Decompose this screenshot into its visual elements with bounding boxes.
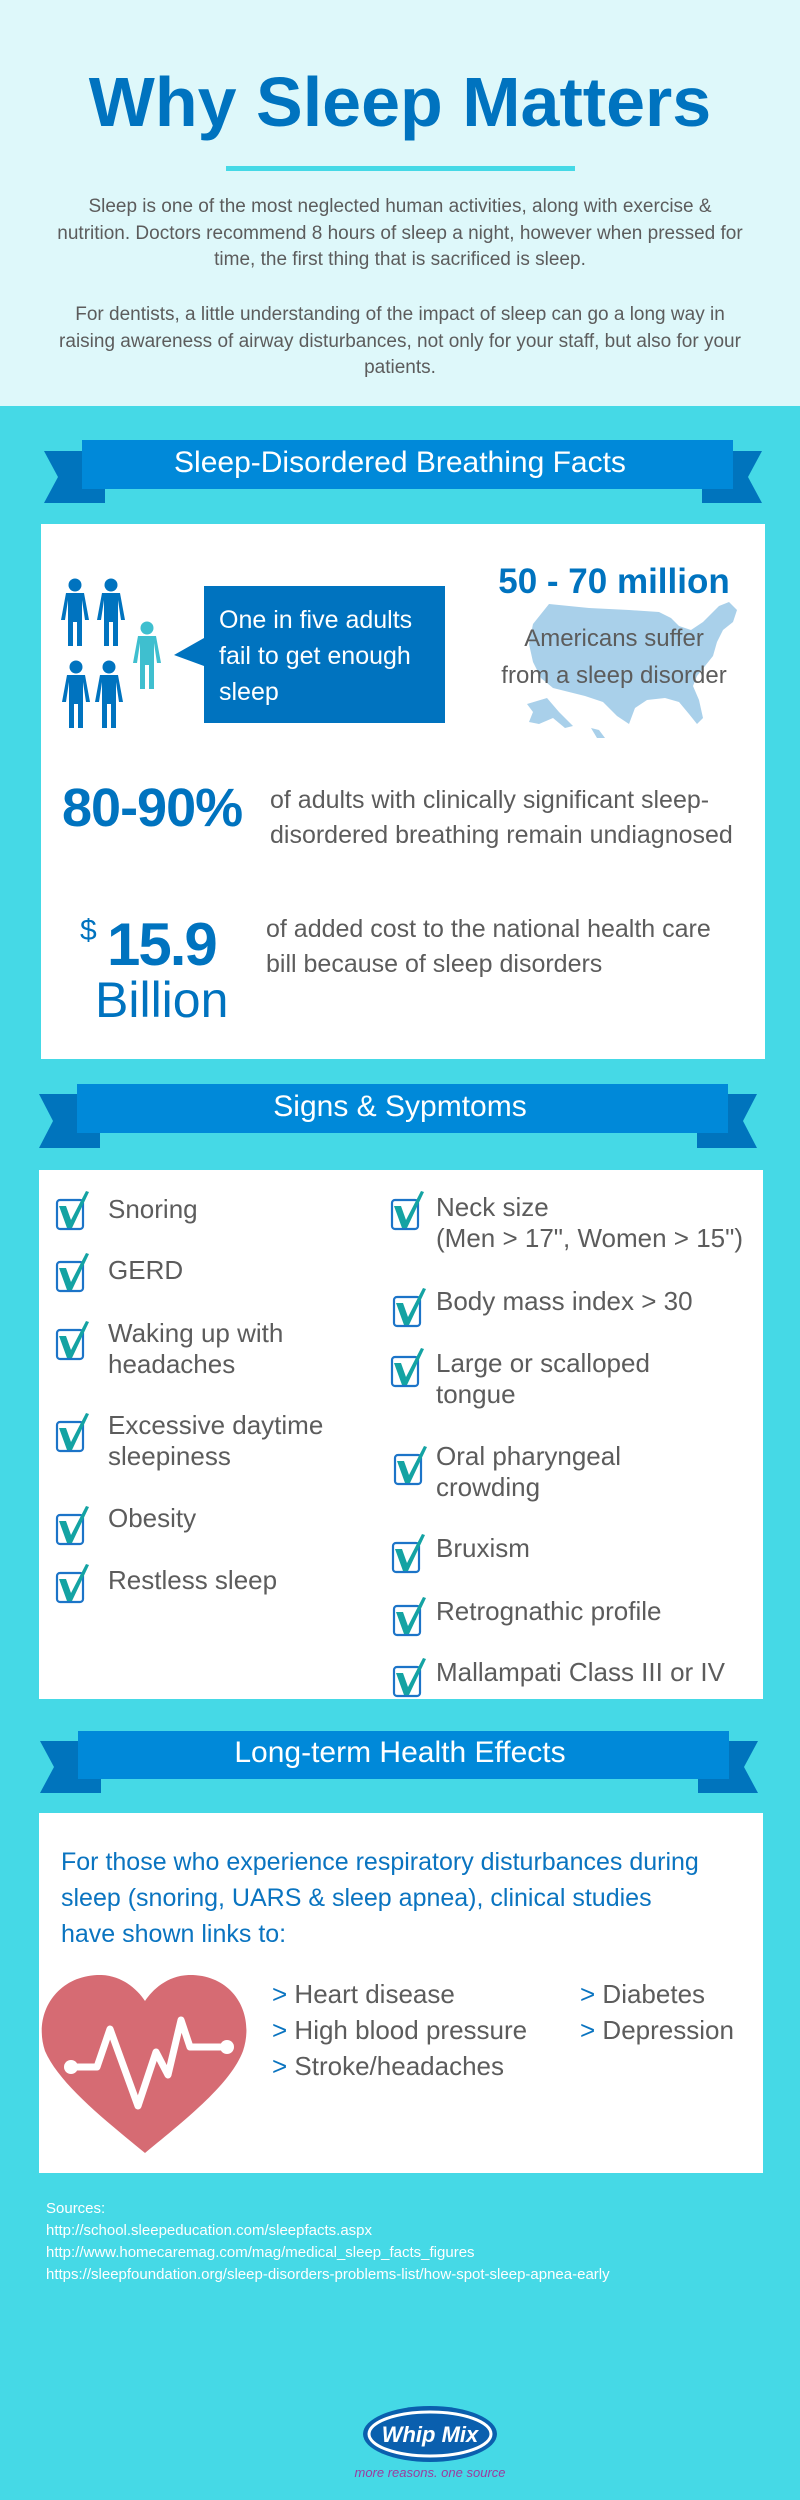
text: undiagnosed — [270, 786, 733, 849]
stat: 50-70 million: 50 - 70 million — [498, 562, 730, 601]
right column symptoms: crowding — [436, 1472, 540, 1502]
banner: Long-term Health Effects: Long-term Health Effects — [234, 1736, 566, 1769]
banner: Signs & Symptoms: Signs & Sypmtoms — [273, 1090, 527, 1123]
intro text — [61, 1848, 699, 1948]
panel: facts — [41, 524, 765, 1059]
left column symptoms: headaches — [108, 1349, 235, 1379]
right column symptoms: Oral pharyngeal — [436, 1441, 621, 1471]
list: effects column 2: > Depression — [580, 2015, 734, 2045]
logo: Whip Mix — [354, 2406, 506, 2480]
panel: health effects — [39, 1813, 763, 2173]
stat: 80-90%: 80-90% — [62, 778, 242, 838]
stat: $15.9 Billion — [80, 911, 228, 1028]
title: Why Sleep Matters — [89, 63, 711, 141]
stat: $15.9 Billion: $ — [80, 914, 97, 947]
stat: $15.9 Billion: 15.9 — [107, 911, 216, 978]
list: effects column 1: > Stroke/headaches — [272, 2051, 504, 2081]
sources: Sources: — [46, 2200, 105, 2217]
intro paragraph 1 — [57, 196, 743, 270]
intro paragraph 2: For dentists, a little understanding of the impact of sleep can go a long way in — [75, 304, 725, 325]
text: Americans suffer: Americans suffer — [524, 625, 704, 652]
header background — [0, 0, 800, 406]
text: added cost — [266, 915, 711, 978]
list: effects column 1 — [272, 1979, 527, 2081]
right column symptoms: Large or scalloped — [436, 1348, 650, 1378]
list: effects column 2: > Diabetes — [580, 1979, 705, 2009]
right column symptoms: Bruxism — [436, 1533, 530, 1563]
right column symptoms: Neck size — [436, 1192, 549, 1222]
callout: one in five adults — [174, 586, 445, 723]
intro paragraph 1: time, the first thing that is sacrificed is sleep. — [214, 249, 586, 270]
sources: http://www.homecaremag.com/mag/medical_sleep_facts_figures — [46, 2244, 475, 2261]
text: undiagnosed: of adults with clinically significant sleep- — [270, 786, 709, 814]
list: effects column 1: > Heart disease — [272, 1979, 455, 2009]
list: effects column 1: > High blood pressure — [272, 2015, 527, 2045]
left column symptoms: Waking up with — [108, 1318, 283, 1348]
left column symptoms: sleepiness — [108, 1441, 231, 1471]
title underline — [226, 166, 575, 171]
text: added cost: of added cost to the national health care — [266, 915, 711, 943]
left column symptoms: Excessive daytime — [108, 1410, 323, 1440]
banner: Sleep-Disordered Breathing Facts: Sleep-Disordered Breathing Facts — [174, 446, 626, 479]
text: Americans suffer — [501, 625, 727, 689]
left column symptoms: Snoring — [108, 1194, 198, 1224]
right column symptoms: (Men > 17", Women > 15") — [436, 1223, 743, 1253]
banner: Long-term Health Effects — [40, 1731, 758, 1793]
intro text: For those who experience respiratory disturbances during — [61, 1848, 699, 1876]
stat: $15.9 Billion: Billion — [95, 972, 228, 1028]
text: undiagnosed: disordered breathing remain undiagnosed — [270, 821, 733, 849]
text: Americans suffer: from a sleep disorder — [501, 662, 727, 689]
text: added cost: bill because of sleep disorders — [266, 950, 602, 978]
left column symptoms — [56, 1191, 323, 1604]
right column symptoms — [390, 1191, 743, 1698]
banner: Sleep-Disordered Breathing Facts — [44, 440, 762, 503]
right column symptoms: Body mass index > 30 — [436, 1286, 693, 1316]
callout: one in five adults: One in five adults — [219, 606, 412, 634]
panel: signs and symptoms — [39, 1170, 763, 1699]
banner: Signs & Symptoms — [39, 1084, 757, 1148]
list: effects column 2 — [580, 1979, 734, 2045]
logo: Whip Mix: more reasons. one source — [354, 2465, 506, 2480]
intro paragraph 1: Sleep is one of the most neglected human activities, along with exercise & — [88, 196, 712, 217]
logo: Whip Mix: Whip Mix — [382, 2422, 479, 2447]
intro paragraph 2: raising awareness of airway disturbances, not only for your staff, but also for your — [59, 330, 741, 352]
intro paragraph 1: nutrition. Doctors recommend 8 hours of sleep a night, however when pressed for — [57, 222, 743, 244]
intro paragraph 2 — [59, 304, 741, 378]
right column symptoms: Mallampati Class III or IV — [436, 1657, 725, 1687]
left column symptoms: Restless sleep — [108, 1565, 277, 1595]
sources: https://sleepfoundation.org/sleep-disorders-problems-list/how-spot-sleep-apnea-early — [46, 2266, 610, 2283]
sources: http://school.sleepeducation.com/sleepfacts.aspx — [46, 2222, 372, 2239]
left column symptoms: Obesity — [108, 1503, 196, 1533]
callout: one in five adults: fail to get enough — [219, 642, 411, 670]
icon: US map — [527, 602, 737, 738]
icon: heart with pulse — [42, 1975, 246, 2153]
intro text: have shown links to: — [61, 1920, 286, 1948]
intro paragraph 2: patients. — [364, 357, 436, 378]
icon: people — [61, 578, 161, 728]
right column symptoms: tongue — [436, 1379, 516, 1409]
intro text: sleep (snoring, UARS & sleep apnea), clinical studies — [61, 1884, 652, 1912]
sources — [46, 2200, 610, 2283]
callout: one in five adults: sleep — [219, 678, 279, 706]
right column symptoms: Retrognathic profile — [436, 1596, 661, 1626]
left column symptoms: GERD — [108, 1255, 183, 1285]
